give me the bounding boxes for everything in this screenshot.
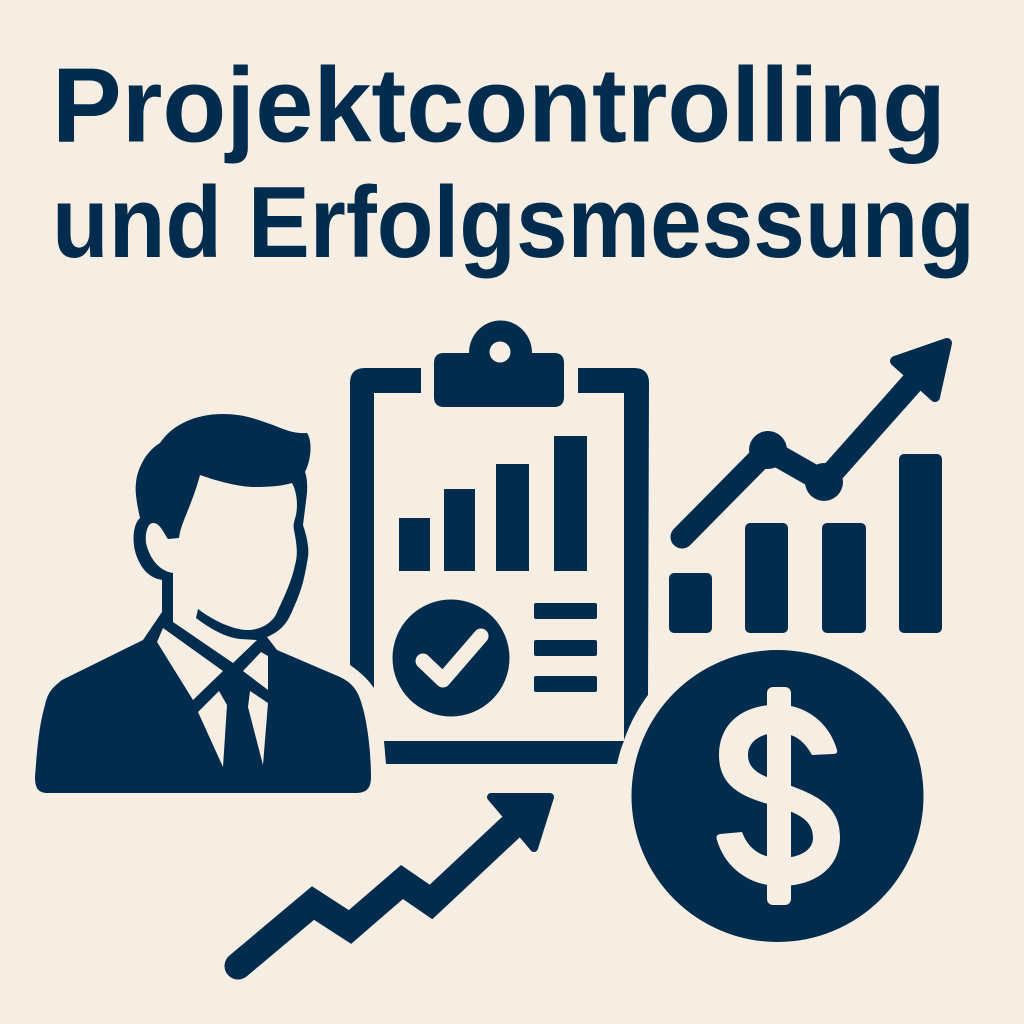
title line 1: Projektcontrolling [52, 46, 946, 164]
clipboard frame right [578, 368, 649, 740]
coin disc [632, 650, 924, 942]
icon: dollar coin [632, 650, 924, 942]
icon: clipboard [350, 320, 649, 764]
zigzag shaft [238, 828, 510, 966]
clipboard clip [434, 320, 564, 407]
check mark badge [392, 600, 510, 716]
bar chart on clipboard [399, 436, 587, 571]
trend arrow head [895, 343, 947, 397]
arrow head [491, 797, 550, 848]
shirt collar right [243, 652, 268, 690]
icon: growth chart with arrow [669, 343, 947, 633]
arrow: rising zigzag [238, 797, 550, 966]
clipboard frame bottom [384, 741, 624, 764]
trend point 1 [749, 431, 787, 469]
shirt collar left [157, 628, 223, 700]
person silhouette with hair and suit [35, 414, 371, 793]
dollar sign [716, 687, 840, 905]
trend line [682, 383, 912, 537]
shirt lower left [198, 691, 227, 767]
face and neck cutout [146, 475, 297, 663]
title [52, 46, 975, 279]
icon: businessman [35, 414, 371, 793]
trend point 2 [805, 463, 843, 501]
chart bars [669, 454, 942, 633]
shirt lower right [248, 691, 268, 765]
checklist lines [534, 603, 597, 692]
clipboard frame left [350, 368, 421, 688]
